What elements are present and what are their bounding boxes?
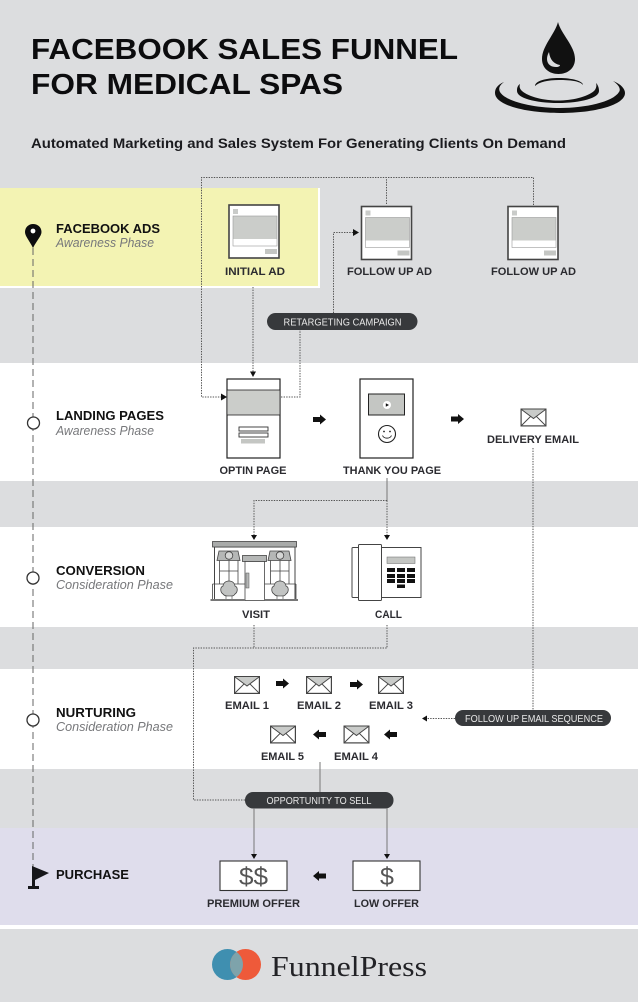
connector: visit and call to opportunity to sell [194, 625, 387, 800]
email 5 [261, 726, 304, 763]
optin page [220, 379, 286, 477]
arrow: optin to thank you [313, 414, 326, 424]
band: nurturing [0, 669, 638, 769]
band: facebook ads [0, 188, 320, 288]
premium offer: PREMIUM OFFER [207, 898, 300, 910]
email 2: EMAIL 2 [297, 700, 341, 712]
email 3 [369, 677, 413, 712]
ad: follow up ad 1: FOLLOW UP AD [347, 266, 432, 278]
arrow: email 1 to 2 [276, 678, 289, 688]
subtitle: Automated Marketing and Sales System For Generating Clients On Demand [31, 135, 566, 151]
logo: funnelpress [212, 949, 427, 983]
stage label: landing pages: Awareness Phase [55, 423, 154, 438]
connector: delivery email to follow up sequence [532, 448, 534, 710]
email 3: EMAIL 3 [369, 700, 413, 712]
icon: store [210, 542, 298, 601]
stage label: landing pages: LANDING PAGES [56, 408, 164, 423]
icon: water drop with ripples [495, 22, 625, 113]
node: nurturing [27, 714, 39, 726]
connector: emails to opportunity to sell [319, 762, 321, 792]
email 5: EMAIL 5 [261, 751, 304, 763]
band: landing pages [0, 363, 638, 481]
arrow: thank you to delivery email [451, 414, 464, 424]
connector: retargeting campaign to follow up ad [334, 229, 359, 313]
stage label: landing pages [55, 408, 164, 438]
title: FOR MEDICAL SPAS [31, 69, 343, 101]
stage label: purchase: PURCHASE [56, 867, 129, 882]
pill: retargeting campaign: RETARGETING CAMPAIGN [284, 318, 402, 328]
email 1 [225, 677, 269, 712]
stage label: conversion: Consideration Phase [56, 577, 173, 592]
connector: thank you page to visit and call [251, 478, 390, 540]
ad: follow up ad 2: FOLLOW UP AD [491, 266, 576, 278]
stage label: nurturing: Consideration Phase [56, 719, 173, 734]
connector: follow up sequence to emails [422, 716, 455, 722]
ad: initial ad: INITIAL AD [225, 266, 285, 278]
connector: optin page to retargeting campaign [281, 330, 300, 397]
stage label: facebook ads: FACEBOOK ADS [56, 221, 160, 236]
email 1: EMAIL 1 [225, 700, 269, 712]
pill: opportunity to sell [245, 792, 394, 808]
thank you page [343, 379, 441, 477]
ad: initial ad [225, 205, 285, 278]
connector: follow-up ads loop to optin page [202, 178, 534, 400]
email 4: EMAIL 4 [334, 751, 379, 763]
icon: phone [352, 544, 421, 600]
logo: funnelpress: FunnelPress [271, 951, 427, 983]
arrow: email 4 to 5 [313, 730, 326, 740]
stage label: conversion [56, 563, 173, 592]
ad: follow up ad 2 [491, 206, 576, 278]
pill: retargeting campaign [267, 313, 418, 330]
icon: flag [28, 866, 49, 889]
title: FACEBOOK SALES FUNNEL [31, 34, 458, 66]
label: call: CALL [375, 609, 402, 621]
title [31, 34, 458, 101]
low offer [353, 861, 420, 910]
low offer: $ [380, 863, 394, 891]
email 4 [334, 726, 379, 763]
stage label: nurturing: NURTURING [56, 705, 136, 720]
connector: initial ad to optin page [250, 287, 256, 377]
thank you page: THANK YOU PAGE [343, 465, 441, 477]
delivery email: DELIVERY EMAIL [487, 434, 579, 446]
band: purchase [0, 828, 638, 929]
premium offer: $$ [239, 863, 268, 891]
arrow: email 3 to 4 [384, 730, 397, 740]
pill: follow up email sequence [455, 710, 611, 726]
premium offer [207, 861, 300, 910]
pill: opportunity to sell: OPPORTUNITY TO SELL [266, 796, 372, 807]
pill: follow up email sequence: FOLLOW UP EMAIL SEQUENCE [465, 714, 603, 725]
node: landing pages [28, 417, 40, 429]
connector: opportunity to offers [251, 808, 390, 859]
stage label: conversion: CONVERSION [56, 563, 145, 578]
stage label: nurturing [56, 705, 173, 734]
icon: map pin [25, 224, 42, 248]
delivery email [487, 409, 579, 446]
low offer: LOW OFFER [354, 898, 419, 910]
timeline [25, 224, 49, 889]
arrow: email 2 to 3 [350, 680, 363, 690]
band: conversion [0, 527, 638, 627]
arrow: low offer to premium offer [313, 871, 326, 881]
email 2 [297, 677, 341, 712]
label: visit: VISIT [242, 609, 270, 621]
stage label: facebook ads: Awareness Phase [55, 235, 154, 250]
optin page: OPTIN PAGE [220, 465, 286, 477]
node: conversion [27, 572, 39, 584]
ad: follow up ad 1 [347, 206, 432, 278]
stage label: facebook ads [55, 221, 160, 250]
